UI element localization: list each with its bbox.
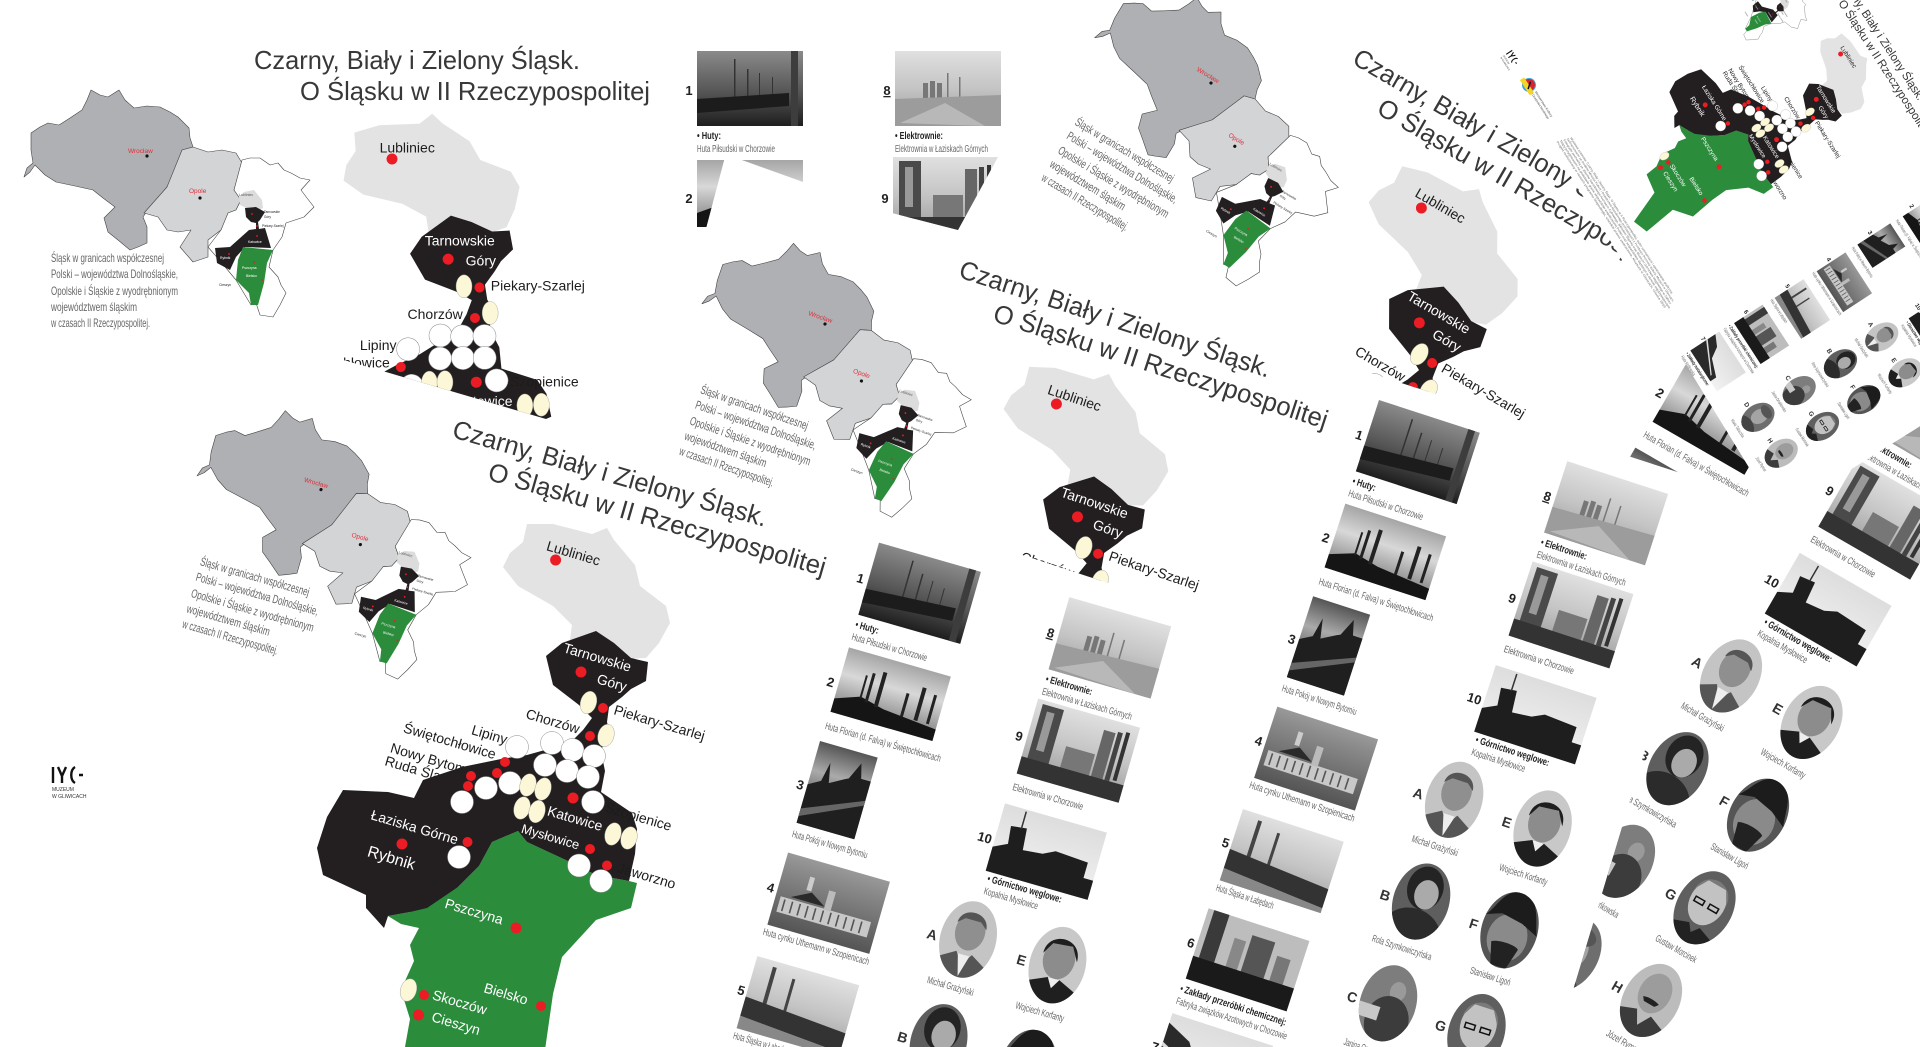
big map copy, reduced, top right (1588, 0, 1902, 296)
caption text: w czasach II Rzeczypospolitej. (50, 316, 150, 330)
label: 10: 10 (873, 298, 887, 313)
red city dots (396, 554, 612, 1020)
photo sheet copy, tilted 30 degrees, under the next sheets (1351, 261, 1920, 1047)
city labels: Mysłowice (520, 821, 581, 852)
title (upright) (254, 45, 650, 106)
caption: Górnictwo węglowe: Kopalnia Mysłowice (894, 352, 950, 363)
credits paragraph, reduced: Dofinansowano ze środków Ministra Kultury i Dziedzictwa Narodowego pochodzących z Funduszu Promocji Kultury, Muzeum w Gliwicach (1566, 137, 1675, 303)
photo 3: Huta Pokój (695, 258, 755, 343)
name D: Maria Tabaczka (865, 774, 911, 785)
name C: Janina Omańkowska (862, 667, 914, 678)
logo: round colour emblem with text (1518, 74, 1556, 122)
portrait G: Gustaw Morcinek (955, 582, 1015, 662)
caption: Huta cynku: Huta cynku Uthemann w Szopienicach (693, 452, 803, 463)
caption text: Śląsk w granicach współczesnej (51, 250, 164, 265)
city labels: Tarnowskie (264, 210, 280, 214)
caption: Elektrownia w Chorzowie: Elektrownia w Chorzowie (893, 244, 966, 255)
big map: Lubliniec, Black and Green Silesia (317, 524, 707, 1047)
label: 6: 6 (682, 618, 690, 633)
small map copy, tilted 19 degrees (652, 222, 1004, 543)
city dots (145, 154, 263, 281)
label: 5: 5 (684, 512, 692, 527)
label: 8: 8 (883, 83, 891, 98)
logo: round colour emblem with text: i Dziedzictwa Narodowego (1531, 93, 1550, 120)
letter D: D (851, 726, 861, 742)
city labels (128, 148, 284, 287)
portrait D (862, 689, 922, 785)
caption: Górnictwo węglowe (894, 339, 971, 363)
credits paragraph, reduced: Projekt realizowany w ramach programu Niepodległa, wszelkie prawa zastrzeżone, Muzeum w Gliwicach, Gliwice 2019 (1556, 140, 1667, 309)
letter H: H (944, 726, 954, 742)
small map with caption (upright) (24, 90, 314, 330)
white page, tilted 57 degrees (1460, 0, 1920, 515)
caption: photo 7: • Zakłady metalurgiczne: (690, 777, 775, 788)
portrait B: Rola Szymkowiczyńska (862, 475, 922, 575)
caption: Huty (697, 131, 775, 155)
small map copy, reduced, top right (1680, 0, 1842, 59)
name F: Stanisław Ligoń (960, 560, 1002, 571)
small map copy, tilted 31 degrees (1016, 0, 1388, 318)
photo 10: Kopalnia Mysłowice (890, 267, 996, 337)
caption: Huta Śląska: Huta Śląska w Łabędach (693, 558, 753, 571)
logo: Muzeum w Gliwicach: W GLIWICACH (52, 794, 87, 800)
title (upright): Czarny, Biały i Zielony Śląsk. (254, 45, 580, 75)
caption text: Opolskie i Śląskie z wyodrębnionym (51, 283, 178, 298)
title copy, tilted 16 degrees (441, 414, 838, 582)
white markers (448, 732, 612, 892)
city labels: Katowice (546, 803, 605, 834)
title copy, tilted 18 degrees (946, 254, 1342, 435)
letter G: G (944, 619, 955, 635)
caption: Zakłady przeróbki chemicznej: Fabryka związków Azotowych w Chorzowie (690, 680, 806, 691)
label: 4: 4 (684, 405, 692, 420)
big map, upright copy, cut by next sheet (344, 114, 584, 419)
city labels: Pszczyna (242, 266, 257, 270)
credits paragraph, reduced: Fotografie pochodzą ze zbiorów Narodowego Archiwum Cyfrowego, Biblioteki Śląskiej oraz Muzeum Górnictwa Węglowego w Zabrzu (1562, 138, 1674, 305)
region: Black Silesia (317, 631, 648, 928)
photo 6: Zakłady Azotowe (692, 587, 798, 661)
city labels: Góry (595, 671, 629, 694)
city labels: Pszczyna (443, 895, 505, 928)
city labels: Katowice (248, 240, 262, 244)
caption text (50, 250, 178, 330)
letter F: F (945, 512, 954, 528)
city labels: Skoczów (431, 987, 490, 1018)
city labels (365, 538, 707, 1038)
photo 5: Huta Śląska (694, 482, 800, 557)
credits paragraph, reduced: Wystawa czasowa: Czarny, Biały i Zielony Śląsk. O Śląsku w II Rzeczypospolitej, autor scenariusza i opracowanie graficzne (1569, 136, 1675, 295)
photo 1: Huta Piłsudski (697, 51, 803, 126)
city labels: Jaworzno (616, 860, 678, 892)
portrait C (862, 582, 922, 666)
photo 4: Huta cynku Uthemann (695, 374, 801, 449)
label: 3: 3 (684, 298, 692, 313)
caption: photo 7: Huta Królewska (690, 790, 740, 801)
city labels: Lipiny (470, 722, 509, 747)
caption: Elektrownie: • Elektrownie: (895, 131, 943, 142)
letter E: E (944, 405, 954, 421)
photo sheet copy, tilted 18 degrees (1131, 395, 1681, 1047)
portrait E: Wojciech Korfanty (955, 368, 1015, 448)
caption: Zakłady przeróbki chemicznej: • Zakłady przeróbki chemicznej: (690, 667, 801, 678)
cream markers (398, 689, 640, 1003)
caption: Huty: Huta Piłsudski w Chorzowie (697, 144, 775, 155)
logo: round colour emblem with text: Ministerstwo Kultury (1534, 90, 1554, 118)
region: Black Silesia (215, 207, 271, 270)
credits paragraph, reduced: Mapy przygotowano na podstawie granic województw współczesnej Polski oraz województwa śląskiego w okresie międzywojennym (1559, 139, 1672, 310)
portrait F: Stanisław Ligoń (955, 475, 1015, 555)
photo sheet copy, reduced, right edge (1677, 166, 1920, 483)
city labels: Szopienice (603, 799, 674, 834)
photo sheet copy, tilted 16 degrees (656, 538, 1185, 1047)
photo 8: Elektrownia (895, 51, 1001, 126)
region: Lubliniec (239, 190, 263, 212)
city labels: Góry (264, 215, 271, 219)
caption text: Polski – województwa Dolnośląskie, (51, 267, 178, 281)
caption: Górnictwo węglowe: • Górnictwo węglowe: (894, 339, 971, 350)
caption text: województwem śląskim (50, 300, 137, 314)
name B: Rola Szymkowiczyńska (857, 560, 919, 571)
name E: Wojciech Korfanty (956, 453, 1006, 464)
labels behind the black region: Nowy Bytom (389, 740, 469, 777)
title copy, tilted 30 degrees (1332, 42, 1706, 293)
caption: Huta Florian: Huta Florian (d. Falva) w Świętochłowicach (696, 235, 816, 248)
portrait H: Józef Rymer (955, 689, 1015, 769)
photo 7: Zakłady (690, 698, 796, 773)
city labels: Lubliniec (545, 538, 602, 569)
caption: Huta Pokój: Huta Pokój w Nowym Bytomiu (694, 350, 772, 361)
region: Green Silesia (236, 247, 273, 305)
city labels: Opole (189, 188, 207, 195)
name A: Michał Grażyński (864, 453, 912, 464)
portrait A: Michał Grażyński (862, 368, 922, 448)
label: 7: 7 (680, 728, 688, 743)
letter C: C (851, 619, 861, 635)
city labels: Bielsko (246, 274, 257, 278)
region: White Silesia (Lubliniec) (503, 524, 670, 660)
label: 1: 1 (685, 83, 693, 98)
city labels: Tarnowskie (562, 640, 634, 675)
city labels: Łaziska Górne (369, 807, 460, 848)
title (upright): O Śląsku w II Rzeczypospolitej (300, 76, 650, 106)
city labels: Cieszyn (219, 283, 231, 287)
city labels: Lubliniec (239, 193, 253, 197)
city labels: Piekary-Szarlej (612, 702, 707, 744)
city labels: Wrocław (128, 148, 153, 155)
labels behind the black region: Świętochłowice (402, 719, 498, 762)
photo sheet, upright, partly covered (686, 51, 1001, 230)
labels behind the black region (383, 719, 498, 790)
city labels: Chorzów (524, 706, 583, 737)
caption: Elektrownie: Elektrownia w Łaziskach Górnych (895, 144, 988, 155)
city labels: Rybnik (365, 844, 418, 874)
city labels: Rybnik (220, 256, 231, 260)
region: Dolnośląskie (24, 90, 193, 250)
label: 9: 9 (881, 191, 889, 206)
region: Śląskie outline (208, 158, 314, 317)
photo 9: Elektrownia w Chorzowie (893, 157, 999, 235)
caption: Huty: • Huty: (697, 131, 721, 142)
region: Opolskie (144, 147, 242, 262)
name G: Gustaw Morcinek (958, 667, 1005, 678)
label: 2: 2 (685, 191, 693, 206)
logo: Muzeum w Gliwicach: MUZEUM (52, 787, 74, 793)
caption: Zakłady przeróbki chemicznej (690, 667, 806, 691)
logo: Muzeum w Gliwicach (52, 767, 87, 800)
caption: Elektrownie (895, 131, 988, 155)
small map copy, tilted 16 degrees (155, 392, 500, 703)
caption: photo 7 (1681, 352, 1709, 386)
city labels: Bielsko (482, 980, 530, 1008)
letter B: B (851, 512, 861, 528)
letter A: A (851, 405, 861, 421)
big map copy, tilted 19 degrees, cut below (796, 359, 1209, 994)
photo 2: Huta Florian (697, 160, 803, 227)
logo copy, reduced (1499, 50, 1521, 71)
labels behind the black region: Ruda Śląska (383, 752, 464, 790)
big map copy, tilted 30 degrees, cut below (1050, 116, 1577, 812)
name H: Józef Rymer (963, 774, 999, 785)
city labels: Cieszyn (430, 1009, 482, 1038)
city labels: Piekary-Szarlej (262, 224, 284, 228)
region: Green Silesia (388, 831, 637, 1047)
title copy, reduced, top right (1824, 0, 1920, 137)
